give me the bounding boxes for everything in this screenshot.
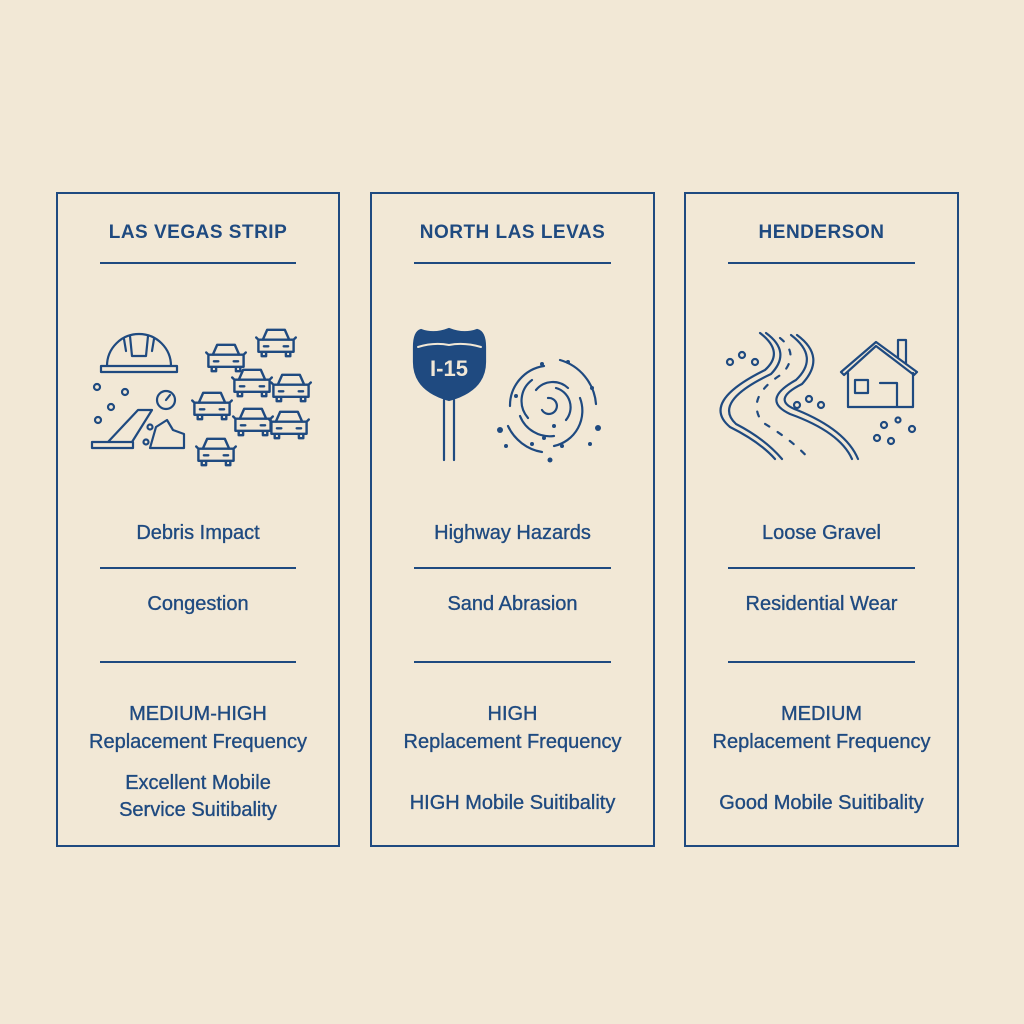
icon: I-15 sign and sand swirl: I-15 [430,356,468,381]
text: rating: Replacement Frequency [404,731,621,753]
text: suitability: Service Suitibality [119,799,277,821]
text: loose gravel: Loose Gravel [762,522,881,544]
text: sand abrasion: Sand Abrasion [447,593,578,615]
text: rating: Replacement Frequency [713,731,930,753]
heading: NORTH LAS LEVAS [420,222,605,243]
text: rating [404,703,622,753]
text: rating [713,703,931,753]
text: rating: MEDIUM [781,703,862,725]
panel: henderson [684,192,959,847]
text: residential wear: Residential Wear [746,593,897,615]
heading: HENDERSON [759,222,884,243]
text: congestion: Congestion [147,593,249,615]
text: rating [89,703,308,753]
text: suitability: Good Mobile Suitibality [719,792,924,814]
text: suitability: Excellent Mobile [125,772,271,794]
text: rating: MEDIUM-HIGH [129,703,267,725]
panel: north las levas [370,192,655,847]
heading: LAS VEGAS STRIP [109,222,287,243]
icon: winding road and house [719,332,918,460]
text: debris impact: Debris Impact [136,522,260,544]
text: rating: Replacement Frequency [89,731,307,753]
panel: las vegas strip [56,192,340,847]
icon: I-15 sign and sand swirl [412,328,601,462]
text: suitability: HIGH Mobile Suitibality [410,792,615,814]
text: suitability [119,772,277,821]
icon: hard hat, debris and traffic [90,328,312,466]
text: rating: HIGH [488,703,538,725]
text: highway hazards: Highway Hazards [434,522,591,544]
